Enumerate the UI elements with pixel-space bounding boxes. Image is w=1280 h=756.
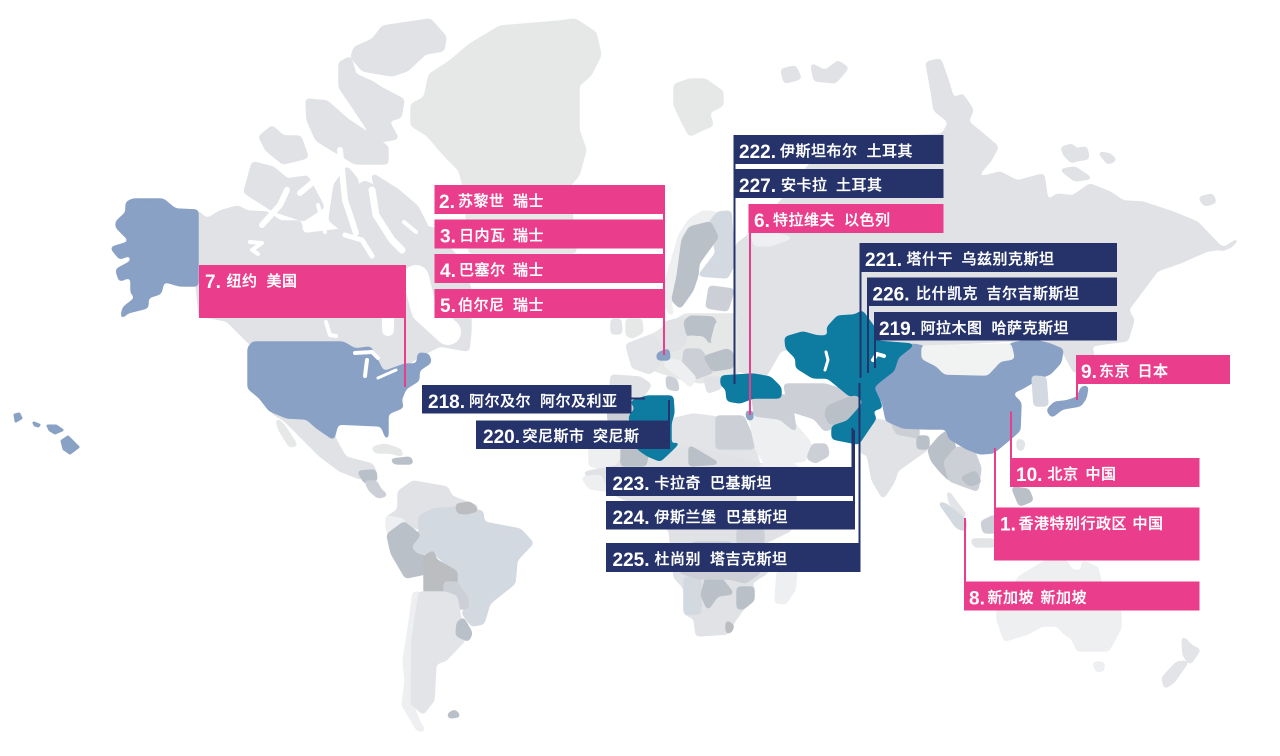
callout: 10 北京: 北京 (1048, 465, 1079, 483)
callout: 226 比什凯克: 比什凯克 (916, 286, 978, 302)
callout: 218 阿尔及尔: 阿尔及尔 (469, 393, 531, 410)
map: africa (583, 402, 800, 635)
callout: 227 安卡拉: 土耳其 (836, 177, 883, 194)
map: middle east (750, 385, 862, 465)
map: india and south east asia (862, 420, 1032, 546)
callout: 222 and 227 leader (734, 135, 736, 384)
callout: 218 阿尔及尔: 218. (428, 392, 465, 413)
callout: 5 伯尔尼: 瑞士 (513, 297, 544, 314)
callout: 218 阿尔及尔: 阿尔及利亚 (540, 393, 618, 410)
callout: 222 伊斯坦布尔 (734, 135, 944, 164)
callout: 6 特拉维夫: 特拉维夫 (773, 211, 835, 229)
map: highlighted countries blue (112, 200, 1087, 453)
map: mongolia (923, 345, 1013, 374)
callout: 6 特拉维夫: 以色列 (844, 212, 891, 229)
callout: 223 卡拉奇: 卡拉奇 (654, 474, 701, 492)
callout: 2 苏黎世 (434, 185, 665, 214)
callout: 221 塔什干: 221. (865, 250, 902, 271)
callout: 219 阿拉木图: 哈萨克斯坦 (992, 320, 1069, 337)
callout: 1 香港特别行政区 (994, 448, 1200, 560)
callout: 10 北京: 中国 (1086, 466, 1117, 483)
callout: 227 安卡拉: 安卡拉 (781, 176, 828, 194)
callout: 5 伯尔尼: 伯尔尼 (458, 297, 505, 314)
callout: 223 卡拉奇: 巴基斯坦 (710, 475, 772, 492)
map: highlighted countries teal (630, 312, 912, 460)
callout: 9 东京: 日本 (1138, 363, 1169, 380)
callout: 3 日内瓦: 3. (440, 226, 456, 248)
callout: 222 伊斯坦布尔: 土耳其 (866, 143, 913, 160)
callout: 9 东京: 东京 (1099, 362, 1130, 380)
callout: 3 日内瓦 (434, 220, 665, 248)
map: russia (737, 60, 1237, 376)
map: western and central europe (610, 315, 737, 405)
callout: 1 香港特别行政区: 1. (1000, 514, 1016, 536)
callout: 1 香港特别行政区: 香港特别行政区 (1018, 516, 1127, 532)
callout: 4 巴塞尔: 巴塞尔 (459, 261, 506, 279)
callout: 7 纽约 (199, 265, 406, 387)
icon: hawaii islands (15, 414, 78, 453)
callout: 10 北京: 10. (1016, 465, 1042, 486)
callout: 222 伊斯坦布尔: 222. (739, 142, 776, 163)
callout: 225 杜尚别: 塔吉克斯坦 (710, 551, 788, 568)
callout: 10 北京 (1010, 412, 1200, 487)
callout: 219 阿拉木图: 阿拉木图 (920, 319, 983, 337)
callout: 227 安卡拉 (734, 169, 944, 198)
callout: 219 阿拉木图: 219. (879, 319, 916, 340)
callout: 2 苏黎世: 2. (439, 192, 455, 213)
callout: 224 伊斯兰堡: 巴基斯坦 (726, 509, 788, 526)
callout: 4 巴塞尔: 4. (440, 261, 456, 282)
map: northern europe (612, 212, 734, 337)
callout: 4 巴塞尔: 瑞士 (513, 262, 544, 279)
callout: 220 突尼斯市: 突尼斯市 (522, 427, 585, 445)
callout: 223 卡拉奇: 223. (612, 474, 649, 495)
callout: 223 卡拉奇 (606, 428, 854, 496)
callout: 6 特拉维夫 (748, 204, 944, 415)
callout: 225 杜尚别: 杜尚别 (654, 551, 701, 568)
callout: 4 巴塞尔 (434, 254, 665, 283)
callout: 221 塔什干: 乌兹别克斯坦 (962, 251, 1055, 268)
callout: 226 比什凯克: 226. (872, 284, 909, 306)
callout: 7 纽约: 7. (205, 272, 221, 293)
callout: 8 新加坡: 新加坡 (1040, 590, 1087, 606)
callout: 224 伊斯兰堡 (606, 430, 855, 530)
callout: 3 日内瓦: 日内瓦 (459, 228, 506, 244)
callout: 8 新加坡: 8. (969, 588, 985, 610)
callout: 7 纽约: 美国 (266, 272, 298, 290)
callout: 220 突尼斯市 (476, 400, 670, 449)
map: south america (387, 482, 532, 730)
callout: 226 比什凯克: 吉尔吉斯斯坦 (986, 286, 1080, 302)
callout: 225 杜尚别 (606, 383, 860, 572)
callout: 224 伊斯兰堡: 224. (612, 508, 649, 529)
callout: 221 塔什干: 塔什干 (906, 251, 953, 268)
callout: 225 杜尚别: 225. (612, 550, 649, 571)
callout: 220 突尼斯市: 突尼斯 (593, 427, 640, 445)
callout: 1 香港特别行政区: 中国 (1132, 516, 1164, 532)
callout: 3 日内瓦: 瑞士 (513, 228, 544, 244)
callout: 9 东京: 9. (1081, 362, 1097, 383)
map: canada (197, 150, 470, 373)
callout: 2 苏黎世: 瑞士 (513, 193, 544, 210)
callout: 8 新加坡: 新加坡 (988, 590, 1034, 606)
callout: 8 新加坡 (964, 518, 1200, 610)
callout: 7 纽约: 纽约 (226, 273, 258, 290)
callout: 227 安卡拉: 227. (739, 176, 776, 197)
callout: 220 突尼斯市: 220. (483, 427, 520, 448)
callout: 9 东京 (1076, 355, 1230, 400)
callouts (199, 135, 1230, 610)
callout: 219 阿拉木图 (874, 312, 1117, 368)
callout: 2 苏黎世: 苏黎世 (458, 193, 505, 210)
callout: 222 伊斯坦布尔: 伊斯坦布尔 (780, 143, 858, 160)
map: greenland and arctic islands (245, 20, 1215, 252)
callout: 5 伯尔尼: 5. (440, 296, 456, 317)
callout: 224 伊斯兰堡: 伊斯兰堡 (654, 509, 717, 526)
map: australia and new zealand (998, 562, 1199, 687)
callout: 2-5 瑞士 cities leader (663, 185, 665, 355)
callout: 226 比什凯克 (867, 278, 1117, 373)
map: mexico and caribbean (272, 412, 412, 497)
callout: 5 伯尔尼 (434, 289, 665, 318)
callout: 218 阿尔及尔 (422, 385, 645, 414)
callout: 221 塔什干 (860, 243, 1117, 378)
callout: 6 特拉维夫: 6. (754, 211, 770, 232)
